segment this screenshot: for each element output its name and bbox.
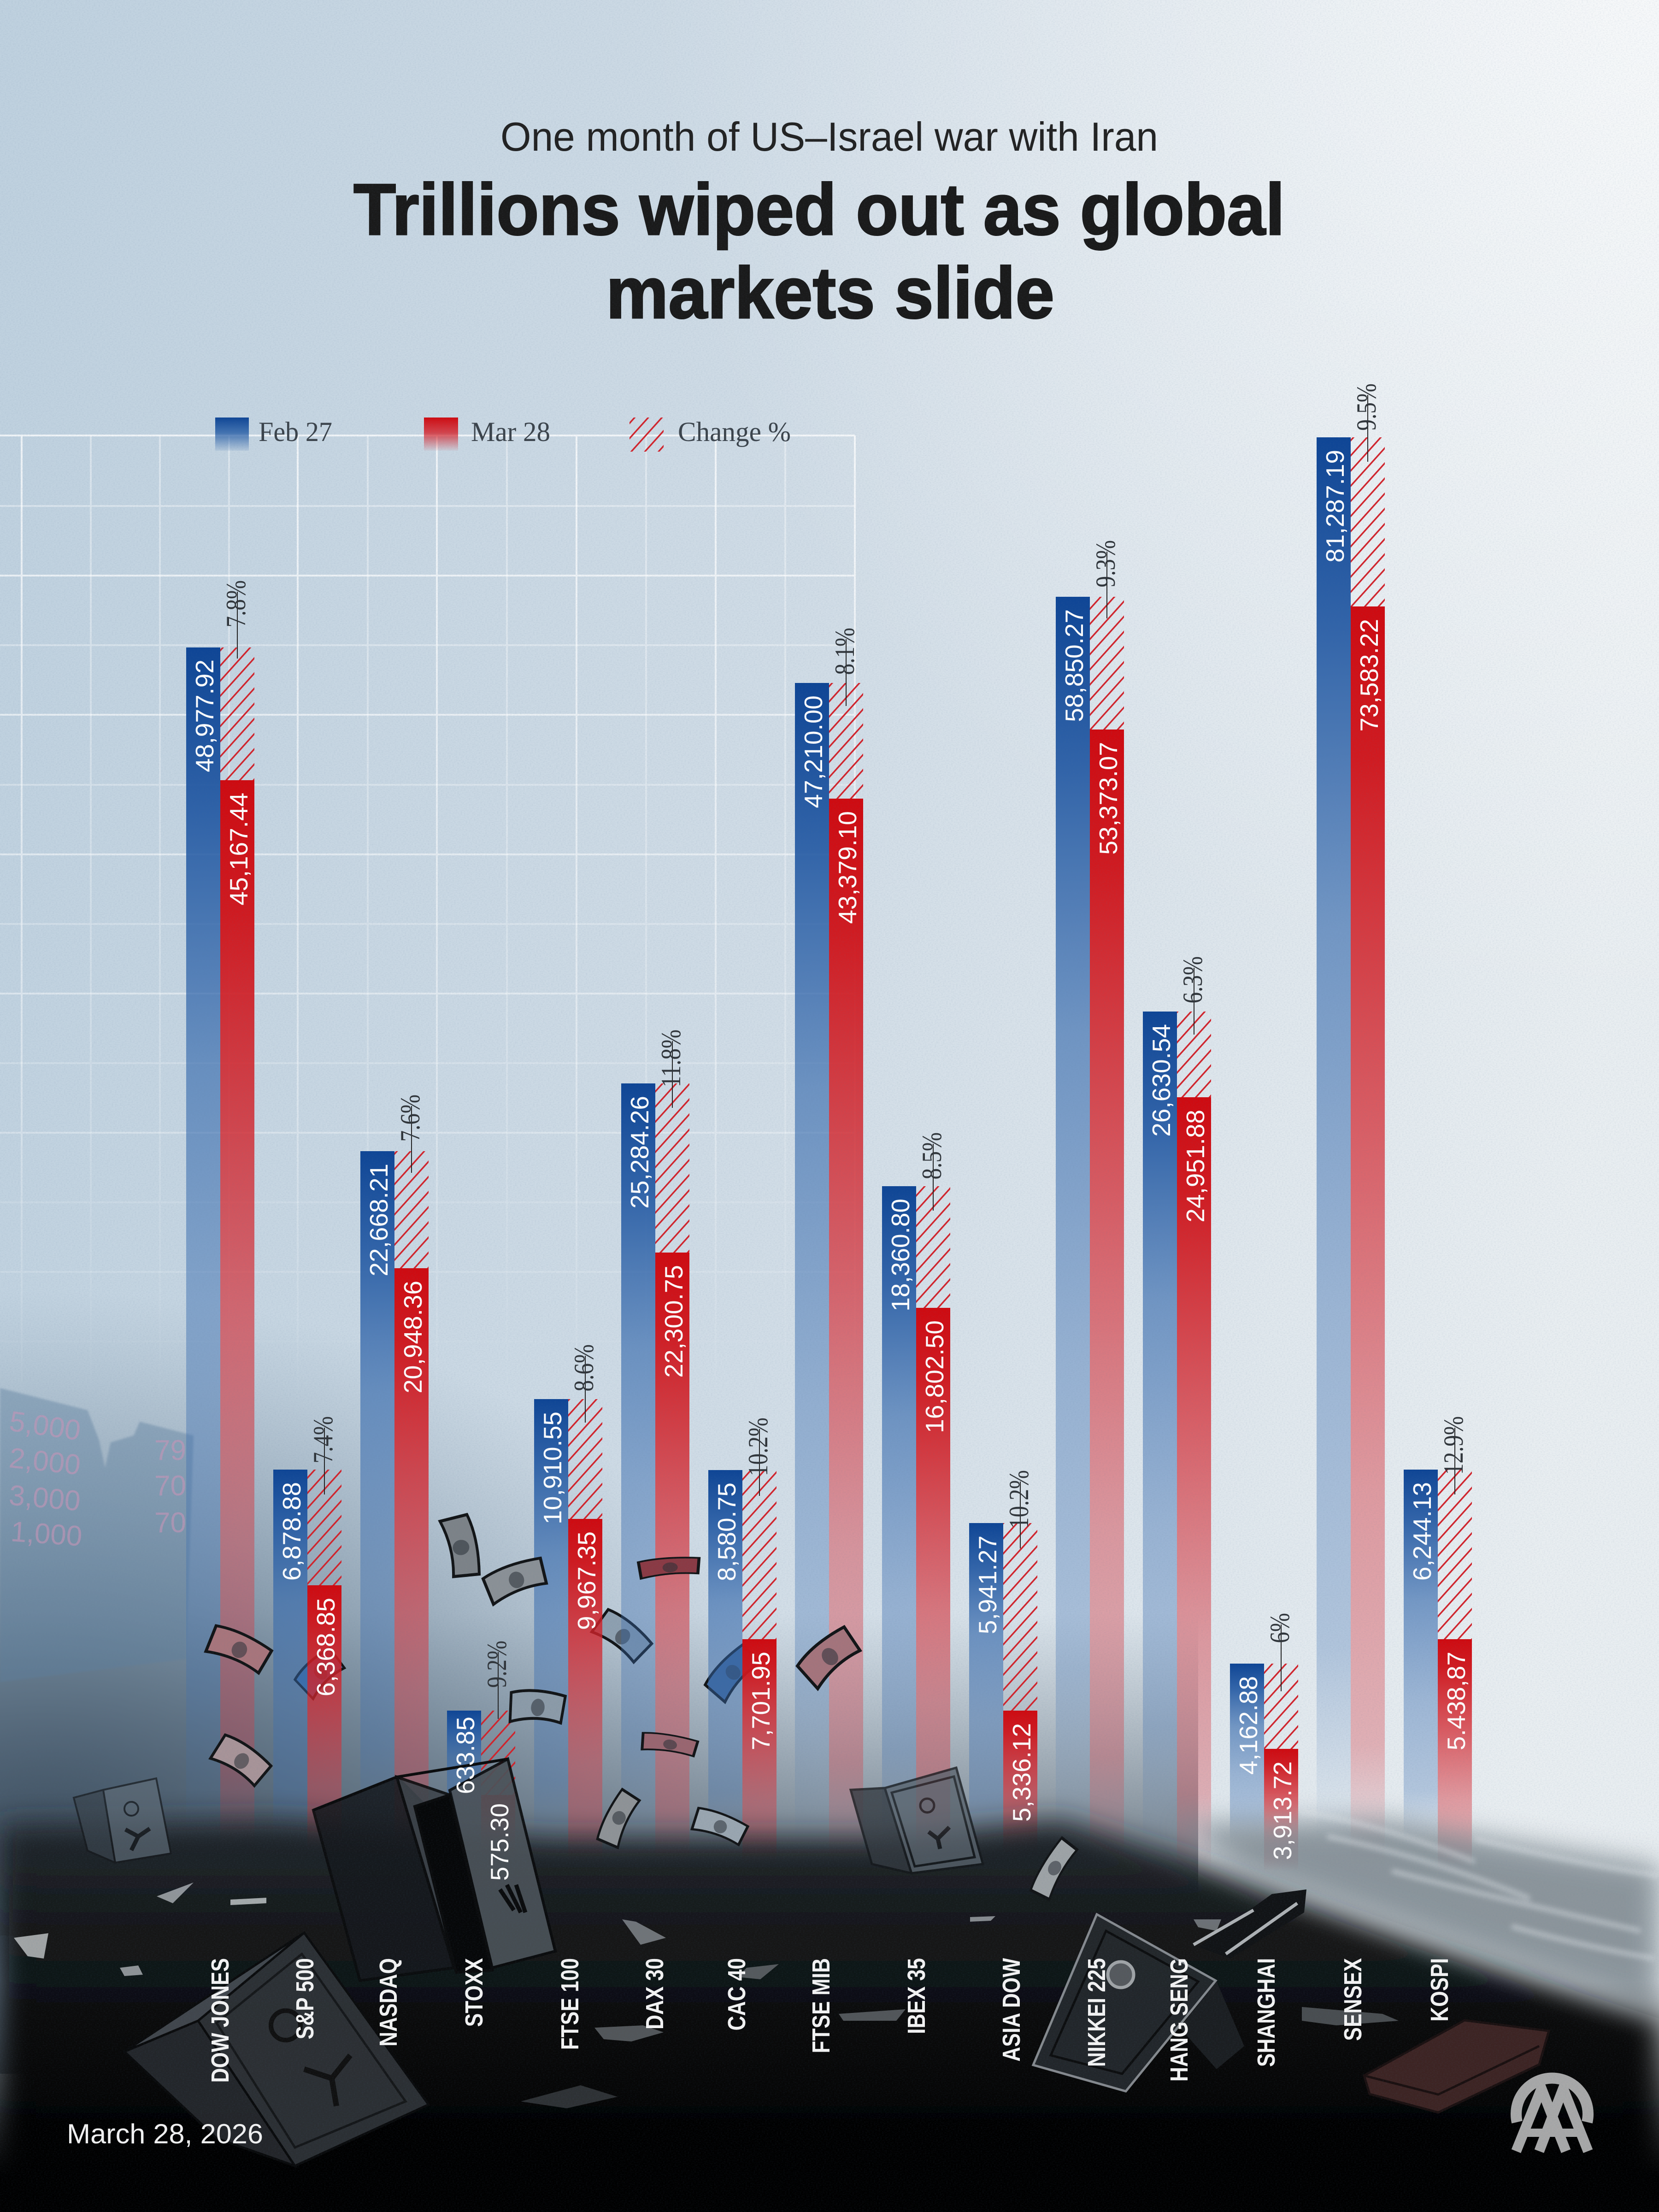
legend label: Feb 27: Feb 27 [259, 417, 332, 447]
value labels: SHANGHAI: 3,913.72 [1268, 1761, 1297, 1860]
category labels: NIKKEI 225 [1083, 1958, 1111, 2067]
value labels: ASIA DOW: 5,336.12 [1007, 1723, 1036, 1822]
background grid [0, 435, 855, 1406]
title [353, 169, 1285, 334]
bars: IBEX 35 [882, 1144, 950, 1871]
value labels: DOW JONES: 45,167.44 [224, 793, 253, 906]
category labels: DOW JONES [206, 1958, 234, 2083]
banknote [638, 1556, 700, 1579]
category labels: FTSE 100 [556, 1958, 584, 2050]
value labels: S&P 500 [277, 1416, 340, 1696]
value labels: HANG SENG: 24,951.88 [1181, 1110, 1210, 1223]
value labels: CAC 40: 10.2% [742, 1418, 773, 1476]
value labels: SENSEX: 73,583.22 [1355, 619, 1383, 732]
icon: dark object with white edges [1194, 1889, 1306, 1959]
value labels: DOW JONES: 48,977.92 [190, 659, 219, 772]
bars: FTSE MIB [795, 639, 863, 1871]
category labels: ASIA DOW [998, 1958, 1025, 2062]
value labels: HANG SENG: 6.3% [1177, 956, 1208, 1003]
banknote [640, 1730, 698, 1759]
value labels: STOXX: 633.85 [451, 1717, 480, 1794]
banknotes falling [204, 1514, 1081, 1901]
value labels: NIKKEI 225: 58,850.27 [1060, 609, 1088, 722]
subtitle: One month of US–Israel war with Iran [500, 114, 1158, 159]
background reflection: market board with faded figures: 79 [154, 1435, 186, 1466]
bars: STOXX [447, 1652, 515, 1871]
category labels: SENSEX [1339, 1958, 1367, 2041]
legend swatch: Feb 27 [215, 418, 249, 451]
icon: safe, centre right [851, 1768, 983, 1873]
value labels: HANG SENG: 26,630.54 [1147, 1024, 1176, 1137]
value labels: CAC 40: 7,701.95 [747, 1652, 775, 1750]
value labels: CAC 40: 8,580.75 [712, 1483, 741, 1581]
icon: safe on its side, bottom left [124, 1933, 429, 2166]
value labels: SHANGHAI [1234, 1613, 1297, 1860]
value labels: HANG SENG [1147, 956, 1210, 1223]
value labels: NASDAQ: 22,668.21 [365, 1164, 393, 1277]
icon: AA logo [1516, 2078, 1588, 2151]
value labels: S&P 500: 6,878.88 [277, 1482, 306, 1581]
bars: NIKKEI 225 [1056, 552, 1124, 1871]
bars: S&P 500 [273, 1428, 341, 1871]
category labels: NASDAQ [375, 1958, 402, 2047]
bars: ASIA DOW [969, 1482, 1037, 1871]
bars: KOSPI [1404, 1428, 1472, 1871]
category labels: CAC 40 [723, 1958, 751, 2030]
value labels: ASIA DOW: 10.2% [1003, 1470, 1034, 1529]
background reflection: market board with faded figures: 70 [154, 1507, 186, 1539]
bars: DOW JONES [186, 592, 254, 1871]
value labels: SHANGHAI: 4,162.88 [1234, 1676, 1263, 1775]
value labels: FTSE 100: 9,967.35 [572, 1531, 601, 1630]
banknote [204, 1622, 273, 1677]
value labels: FTSE MIB [799, 628, 862, 924]
background reflection: market board with faded figures: 3,000 [8, 1479, 82, 1517]
bars: HANG SENG [1143, 968, 1211, 1871]
value labels: KOSPI [1408, 1416, 1471, 1750]
value labels: IBEX 35: 16,802.50 [920, 1320, 949, 1433]
value labels: FTSE MIB: 47,210.00 [799, 695, 828, 808]
value labels: KOSPI: 12.9% [1438, 1416, 1469, 1475]
legend label: Mar 28: Mar 28 [471, 417, 550, 447]
bars: FTSE 100 [534, 1356, 602, 1871]
banknotes behind bars [292, 1606, 763, 1703]
value labels: NIKKEI 225: 9.3% [1090, 540, 1121, 587]
value labels: SENSEX: 81,287.19 [1321, 450, 1349, 563]
value labels: FTSE MIB: 8.1% [829, 628, 860, 675]
value labels: SENSEX [1321, 383, 1383, 732]
title: markets slide [606, 253, 1054, 334]
category labels: STOXX [460, 1958, 488, 2027]
value labels: DOW JONES: 7.8% [220, 580, 251, 627]
value labels: NIKKEI 225 [1060, 540, 1123, 855]
value labels: S&P 500: 6,368.85 [312, 1598, 340, 1696]
value labels: STOXX [451, 1641, 514, 1881]
category labels: HANG SENG [1165, 1958, 1193, 2082]
icon: tilted safe, lower centre [1033, 1914, 1244, 2091]
background reflection: market board with faded figures [0, 1388, 194, 1682]
value labels: ASIA DOW [973, 1470, 1036, 1822]
value labels: IBEX 35 [886, 1132, 949, 1433]
banknote [209, 1731, 272, 1790]
ground debris: scattered paper [14, 1883, 1399, 2108]
value labels: FTSE MIB: 43,379.10 [833, 811, 862, 924]
value labels: NASDAQ: 20,948.36 [399, 1281, 427, 1394]
banknote [794, 1625, 864, 1690]
legend label: Change %: Change % [678, 417, 791, 447]
legend swatch: Mar 28 [424, 418, 458, 451]
value labels: FTSE 100 [538, 1344, 601, 1630]
value labels: FTSE 100: 10,910.55 [538, 1412, 567, 1524]
value labels: SHANGHAI: 6% [1264, 1613, 1295, 1643]
ground: dark rubble field [0, 1811, 1659, 2212]
value labels: CAC 40 [712, 1418, 775, 1750]
value labels: NIKKEI 225: 53,373.07 [1094, 742, 1123, 855]
chart: bars [186, 395, 1472, 1871]
banknote [594, 1788, 643, 1849]
banknote [690, 1805, 748, 1848]
banknote [1028, 1837, 1081, 1901]
value labels: DAX 30: 11.8% [655, 1030, 686, 1087]
banknote [440, 1514, 482, 1579]
value labels: DAX 30: 25,284.26 [625, 1096, 654, 1209]
value labels: DAX 30 [625, 1030, 688, 1378]
value labels: NASDAQ [365, 1094, 427, 1394]
icon: large open safe [313, 1759, 555, 1981]
banknote [508, 1688, 565, 1727]
value labels: SENSEX: 9.5% [1351, 383, 1382, 430]
category labels: DAX 30 [641, 1958, 669, 2030]
value labels: DAX 30: 22,300.75 [659, 1265, 688, 1378]
value labels: KOSPI: 6,244.13 [1408, 1482, 1436, 1581]
value labels: ASIA DOW: 5,941.27 [973, 1535, 1002, 1634]
background reflection: market board with faded figures: 70 [154, 1470, 186, 1502]
value labels: FTSE 100: 8.6% [568, 1344, 599, 1391]
value labels: IBEX 35: 8.5% [916, 1132, 947, 1179]
legend [215, 417, 791, 452]
category labels: KOSPI [1426, 1958, 1453, 2022]
background reflection: market board with faded figures: 2,000 [8, 1442, 82, 1481]
bars: CAC 40 [708, 1429, 777, 1871]
value labels: STOXX: 575.30 [485, 1803, 514, 1881]
value labels: DOW JONES [190, 580, 253, 906]
legend swatch: Change % [629, 418, 664, 452]
background reflection: market board with faded figures: 5,000 [7, 1406, 82, 1447]
bars: NASDAQ [360, 1106, 429, 1871]
date: March 28, 2026 [67, 2118, 263, 2149]
icon: red-brown briefcase [1364, 2020, 1549, 2112]
bars: SHANGHAI [1230, 1624, 1298, 1871]
category labels: SHANGHAI [1253, 1958, 1280, 2067]
banknote [482, 1556, 549, 1605]
title: Trillions wiped out as global [353, 169, 1285, 250]
category labels: IBEX 35 [903, 1958, 930, 2034]
category labels [206, 1958, 1453, 2083]
value labels: KOSPI: 5.438,87 [1442, 1652, 1471, 1750]
bars: SENSEX [1317, 395, 1385, 1871]
icon: small safe, left [74, 1778, 171, 1863]
category labels: FTSE MIB [807, 1958, 835, 2053]
background reflection: market board with faded figures: 1,000 [10, 1516, 83, 1553]
value labels: IBEX 35: 18,360.80 [886, 1199, 915, 1312]
value labels: S&P 500: 7.4% [307, 1416, 338, 1463]
value labels: NASDAQ: 7.6% [394, 1094, 425, 1141]
value labels: STOXX: 9.2% [481, 1641, 512, 1688]
bars: DAX 30 [621, 1041, 689, 1871]
category labels: S&P 500 [291, 1958, 319, 2039]
